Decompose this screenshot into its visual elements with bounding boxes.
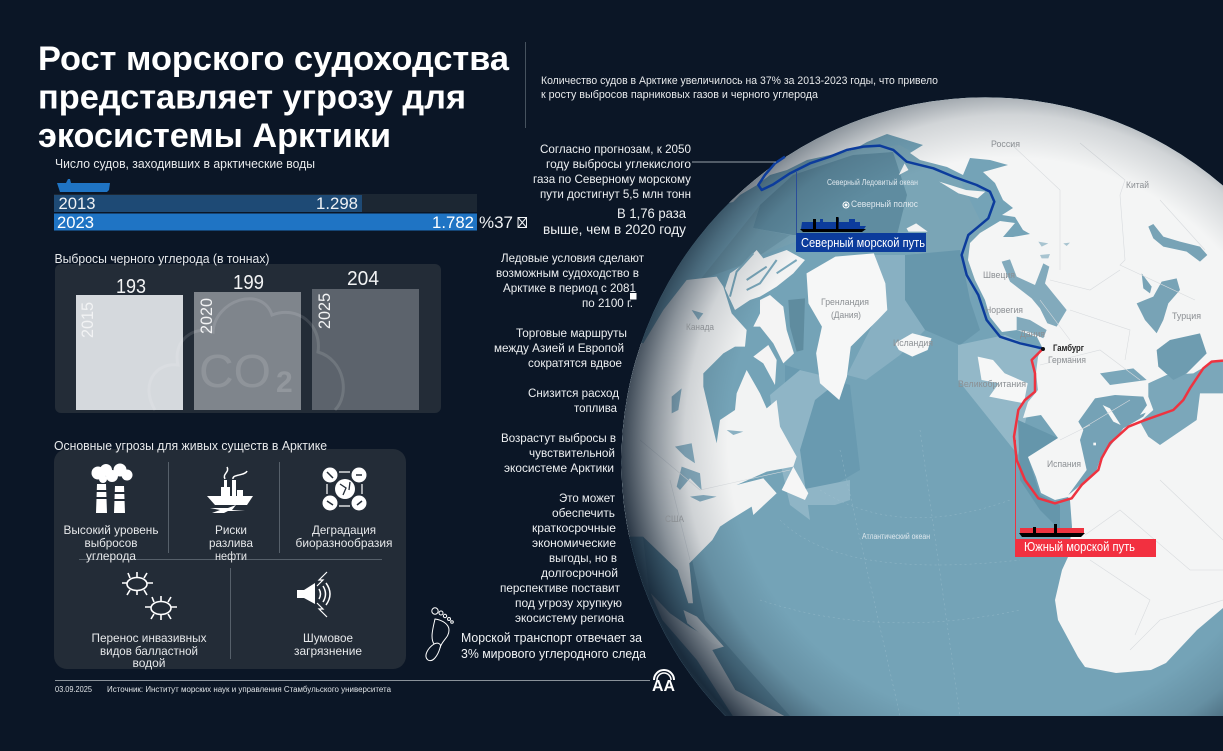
heading: threats: Основные угрозы для живых существ в Арктике [54,439,327,453]
title [38,40,510,155]
callout: southern sea route [1015,440,1156,557]
footer: date and source: Источник: Институт морских наук и управления Стамбульского университета [107,685,392,694]
text: long-term risk [500,491,624,625]
map labels: Дания [1020,329,1045,340]
text: long-term risk: обеспечить [552,506,615,520]
text: CO2 forecast: газа по Северному морскому [533,172,691,186]
threat: noise: загрязнение [294,644,362,658]
map labels: Гренландия [821,297,869,308]
threat: carbon emissions: углерода [86,549,136,563]
text: emissions: чувствительной [529,446,615,460]
subtitle [541,75,938,101]
sea: Baffin Bay [788,298,805,352]
icon: CO2 cloud: CO [199,345,271,397]
threat: oil spill: нефти [215,549,247,563]
icon: CO2 cloud [149,299,343,410]
callout: northern sea route: Северный морской путь [801,235,925,250]
text: carbon footprint: 3% мирового углеродного следа [461,646,647,661]
text: long-term risk: Это может [559,491,616,505]
title: экосистемы Арктики [38,117,391,155]
sea: Baltic [1002,259,1067,327]
bar: 2025 [312,268,419,410]
threat: carbon emissions [64,464,158,563]
graticule [760,430,1020,716]
icon: footprint [426,608,453,661]
callout: northern sea route [692,162,926,252]
text: trade routes: Торговые маршруты [516,326,627,340]
text: ice conditions [496,251,645,310]
text: CO2 forecast: В 1,76 раза [617,205,686,221]
map labels: Швеция [983,270,1015,281]
land: Baffin Island [753,295,794,363]
lakes [1038,242,1070,258]
threat: noise [294,572,362,658]
map labels: Северный Ледовитый океан [827,178,918,187]
icon: factory chimneys [92,464,132,513]
globe map [600,90,1223,720]
map labels: Россия [991,139,1020,150]
sea: Caspian [1148,224,1207,262]
map labels: США [665,514,685,525]
southern sea route line [1014,350,1223,503]
text: trade routes: между Азией и Европой [494,341,624,355]
land: Iceland [895,333,932,357]
map labels: Атлантический океан [862,532,930,541]
map labels: Исландия [893,338,933,349]
map labels: Великобритания [958,379,1026,390]
text: CO2 forecast: выше, чем в 2020 году [543,221,686,237]
map labels: Северный полюс [851,199,918,209]
text: long-term risk: выгоды, но в [549,551,617,565]
threat: biodiversity: биоразнообразия [296,536,392,550]
text: CO2 forecast: Согласно прогнозам, к 2050 [540,142,691,156]
text: long-term risk: перспективе поставит [500,581,621,595]
icon: ship with oil spill [207,467,253,513]
icon: speaker [297,572,330,617]
text: emissions: Возрастут выбросы в [501,431,616,445]
icon: bacteria [122,572,177,620]
heading: ship counts: Число судов, заходивших в арктические воды [55,157,315,171]
land: Cuba [683,610,724,647]
text: fuel [528,386,619,415]
globe shading [621,97,1223,716]
bar: 2015: 193 [116,276,146,298]
title: Рост морского судоходства [38,40,510,78]
text: ice conditions: возможным судоходство в [496,266,639,280]
logo: AA [652,670,675,695]
text: carbon footprint: Морской транспорт отвечает за [461,630,643,645]
text: long-term risk: под угрозу хрупкую [515,596,622,610]
bar: 2013 [54,194,362,213]
subtitle: к росту выбросов парниковых газов и черного углерода [541,89,819,101]
panel: threats [54,439,406,670]
map labels: Норвегия [985,305,1023,316]
bar: 2020: 199 [233,272,264,294]
land: Newfoundland [782,467,808,500]
sea: Mediterranean [1068,333,1223,495]
land: Southampton Island [753,345,777,385]
northern sea route line [758,146,1042,348]
bar: 2015: 2015 [78,302,97,338]
threat: oil spill: разлива [209,536,253,550]
heading: black carbon: Выбросы черного углерода (в тоннах) [54,252,270,266]
panel: black carbon emissions [54,252,441,413]
map labels: Германия [1048,355,1086,366]
threat: invasive species: Перенос инвазивных [92,631,206,645]
land: Arctic archipelago [725,250,805,310]
text: long-term risk: экономические [532,536,616,550]
island channels [730,253,797,297]
bar track [54,194,477,212]
ocean depth shading [643,145,1060,716]
increase label: %37 [479,213,513,232]
map labels: Турция [1172,311,1201,322]
footer rule [55,680,650,682]
threat: biodiversity [296,468,392,550]
lakes [672,310,743,502]
country borders [640,143,1223,650]
icon: biodiversity cycle [322,468,366,510]
land: Britain [978,357,1028,403]
land: Central and South America [651,593,785,720]
threat: carbon emissions: Высокий уровень [64,523,158,537]
bar: 2025: 2025 [315,293,334,329]
title divider [524,42,526,128]
icon: ship [57,179,110,192]
text: ice conditions: Ледовые условия сделают [501,251,645,265]
callout: southern sea route: Южный морской путь [1024,539,1135,554]
text: CO2 forecast: пути достигнут 5,5 млн тонн [540,187,691,201]
sea: Black Sea [1137,278,1180,333]
icon: CO2 cloud: 2 [276,366,293,399]
panel: ship counts [54,157,526,232]
threat: oil spill: Риски [215,523,247,537]
land: Arctic islands [899,163,985,232]
land: Greenland [807,253,887,400]
text: emissions [501,431,616,475]
map labels: Испания [1047,459,1081,470]
threat: noise: Шумовое [303,631,353,645]
bar: 2020 [194,272,301,410]
threat: oil spill [207,467,253,563]
footer: date and source: 03.09.2025 [55,685,93,694]
text: long-term risk: экосистему региона [515,611,624,625]
title: представляет угрозу для [38,78,466,116]
land: Eurasia and Africa [720,90,1223,673]
bar: 2015 [76,276,183,410]
bar: 2023 [54,213,477,232]
threat: carbon emissions: выбросов [84,536,138,550]
land: Canada mainland and USA [600,250,808,603]
map labels: Гамбург [1053,343,1084,353]
threat: invasive species: водой [132,656,166,670]
text: long-term risk: краткосрочные [532,521,616,535]
text: trade routes [494,326,627,370]
bar: 2023: 1.782 [432,213,474,232]
map labels: (Дания) [831,310,861,321]
text: CO2 forecast [533,142,691,237]
text: CO2 forecast: году выбросы углекислого [546,157,691,171]
logo: AA: AA [652,678,675,695]
text: ice conditions: Арктике в период с 2081 [503,281,636,295]
bar: 2013: 1.298 [316,194,358,213]
map labels [665,139,1201,541]
sea: Skagerrak [1017,317,1047,338]
text: trade routes: сократятся вдвое [528,356,622,370]
map labels: Канада [686,322,715,333]
bar: 2023: 2023 [57,213,94,232]
text: carbon footprint [461,630,647,661]
bar: 2013: 2013 [58,194,96,213]
text: ice conditions: по 2100 г. [582,296,633,310]
threat: invasive species: видов балластной [100,644,198,658]
subtitle: Количество судов в Арктике увеличилось на 37% за 2013-2023 годы, что привело [541,75,938,87]
text: fuel: топлива [574,401,617,415]
threat: invasive species [92,572,206,670]
threat: biodiversity: Деградация [312,523,376,537]
bar: 2025: 204 [347,268,379,290]
text: long-term risk: долгосрочной [541,566,618,580]
text: fuel: Снизится расход [528,386,619,400]
text: emissions: экосистеме Арктики [504,461,614,475]
map labels: Китай [1126,180,1149,191]
bar: 2020: 2020 [197,298,216,334]
